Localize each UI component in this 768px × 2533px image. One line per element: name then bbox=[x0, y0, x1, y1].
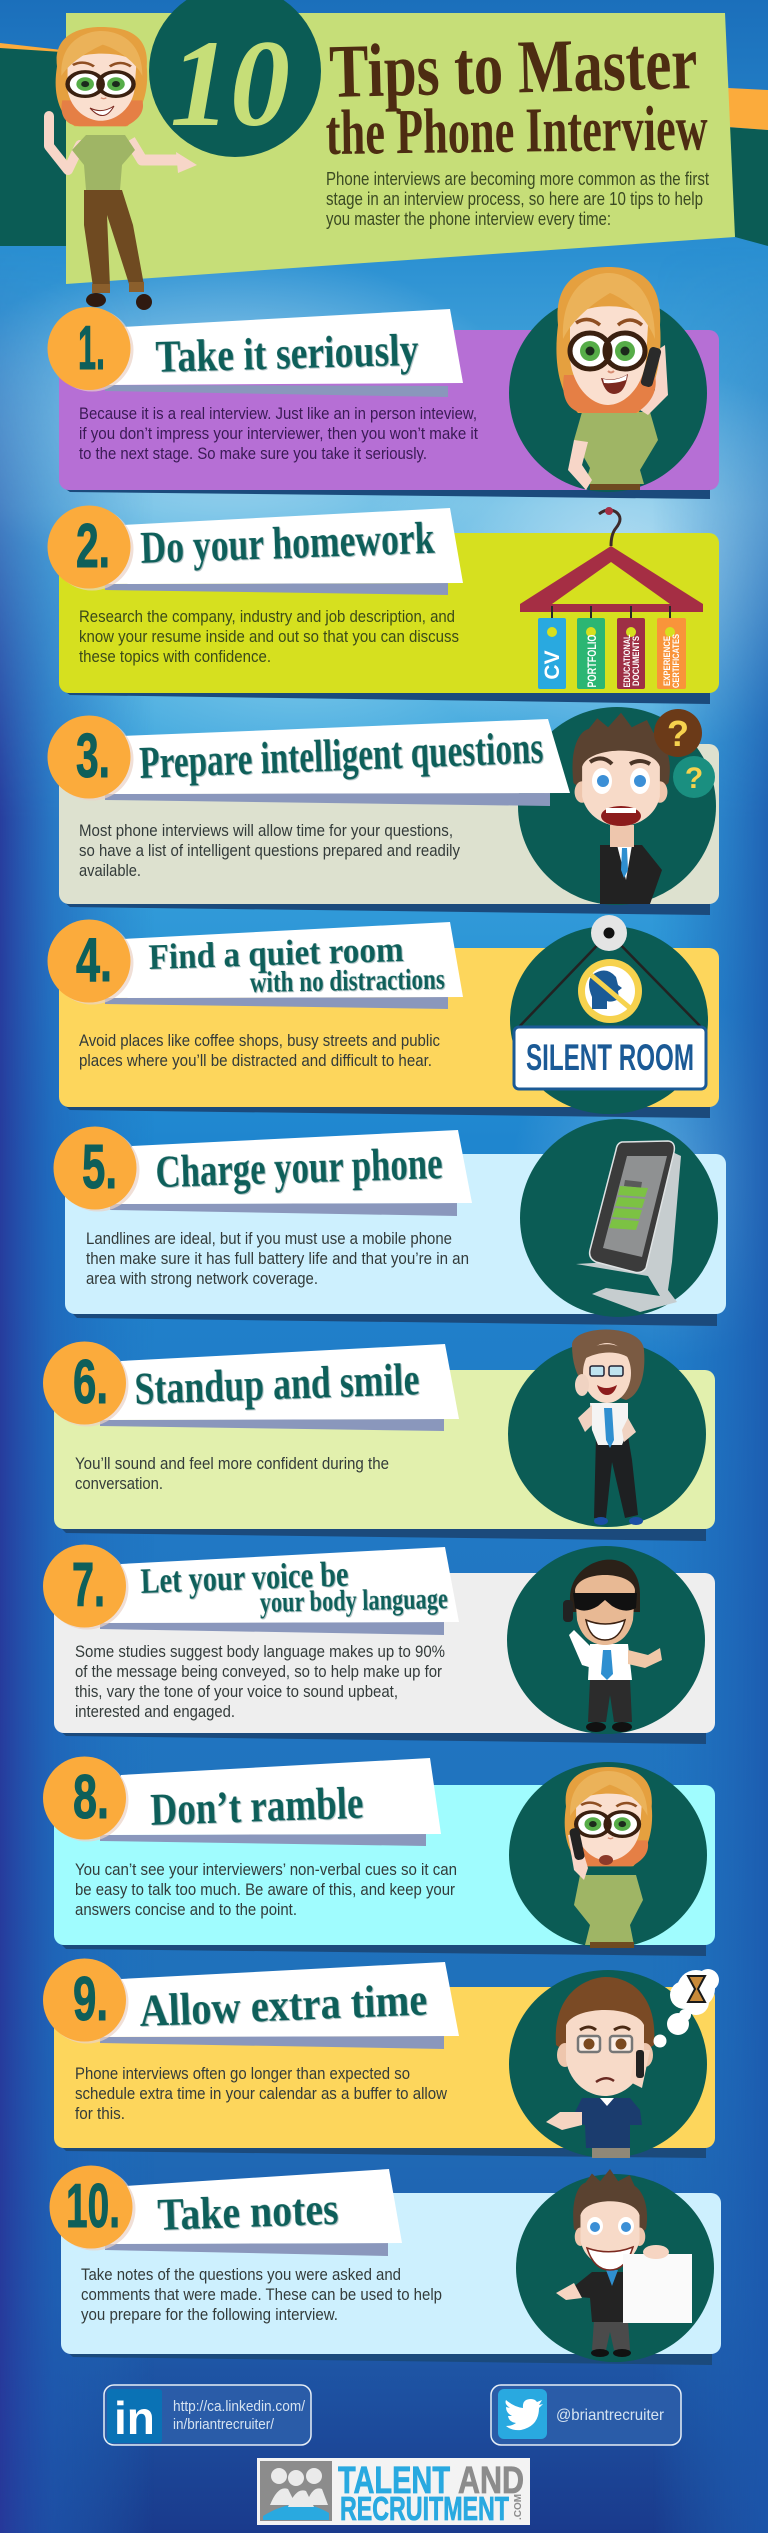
banner bbox=[100, 1834, 426, 1846]
banner bbox=[105, 997, 448, 1009]
body bbox=[75, 1861, 457, 1919]
banner white bbox=[100, 1344, 459, 1420]
character: worried woman on phone bbox=[565, 1767, 652, 1948]
character: confused man with question marks bbox=[572, 709, 715, 904]
logo: talent and recruitment: AND bbox=[458, 2460, 524, 2502]
number bbox=[43, 1544, 128, 1630]
body: You’ll sound and feel more confident during the bbox=[75, 1455, 389, 1473]
banner white bbox=[105, 922, 463, 998]
body: area with strong network coverage. bbox=[86, 1270, 318, 1288]
character: woman on phone bbox=[556, 267, 668, 490]
banner bbox=[100, 2036, 444, 2049]
panel: tip 5 bbox=[65, 1154, 726, 1314]
tip 4 bbox=[48, 915, 719, 1118]
body: available. bbox=[79, 862, 141, 880]
number: 9. bbox=[73, 1965, 108, 2034]
body bbox=[86, 1230, 469, 1288]
number bbox=[54, 1126, 140, 1212]
number bbox=[48, 307, 134, 392]
banner bbox=[105, 385, 448, 397]
circle bbox=[507, 1546, 705, 1734]
number bbox=[43, 1342, 128, 1426]
character: confused man with question marks: ? bbox=[685, 762, 703, 795]
icon: coat hanger with document tags: CERTIFICATES bbox=[671, 634, 681, 688]
banner bbox=[105, 793, 550, 806]
icon: coat hanger with document tags: PORTFOLIO bbox=[585, 634, 599, 688]
body: You can’t see your interviewers’ non-verbal cues so it can bbox=[75, 1861, 457, 1879]
header band: teal and orange ribbons bbox=[0, 43, 768, 246]
body: for this. bbox=[75, 2105, 125, 2123]
number bbox=[43, 1958, 128, 2044]
character: man holding paper bbox=[556, 2169, 692, 2357]
body: know your resume inside and out so that you can discuss bbox=[79, 628, 459, 646]
banner bbox=[110, 1203, 457, 1216]
linkedin contact box bbox=[104, 2385, 311, 2445]
number: 6. bbox=[73, 1348, 108, 1417]
panel: tip 10 bbox=[61, 2193, 721, 2354]
banner bbox=[100, 1419, 444, 1431]
heading: your body language bbox=[259, 1582, 448, 1619]
number bbox=[48, 506, 134, 590]
body: Because it is a real interview. Just like an in person inteview, bbox=[79, 405, 477, 423]
heading: Take notes bbox=[157, 2183, 339, 2240]
body bbox=[79, 608, 459, 666]
body: Research the company, industry and job description, and bbox=[79, 608, 455, 626]
character: confused man with question marks: ? bbox=[667, 713, 689, 754]
tip 5 bbox=[54, 1119, 726, 1326]
body: Avoid places like coffee shops, busy streets and public bbox=[79, 1032, 440, 1050]
circle bbox=[520, 1119, 718, 1317]
tip 10 bbox=[50, 2166, 721, 2365]
tip 3 bbox=[48, 707, 719, 915]
icon: silent room sign bbox=[514, 915, 706, 1089]
body: conversation. bbox=[75, 1475, 163, 1493]
icon: coat hanger with document tags bbox=[520, 507, 703, 689]
banner white bbox=[105, 508, 463, 584]
body: places where you’ll be distracted and difficult to hear. bbox=[79, 1052, 432, 1070]
logo: talent and recruitment bbox=[257, 2458, 530, 2527]
banner white bbox=[100, 1547, 459, 1623]
tip 1 bbox=[48, 267, 719, 499]
panel: tip 1 bbox=[59, 330, 719, 490]
number: 5. bbox=[82, 1133, 117, 1202]
number bbox=[50, 2166, 136, 2250]
body: these topics with confidence. bbox=[79, 648, 271, 666]
body: you prepare for the following interview. bbox=[81, 2306, 338, 2324]
body: answers concise and to the point. bbox=[75, 1901, 297, 1919]
body bbox=[75, 1455, 389, 1493]
panel: tip 2 bbox=[59, 533, 719, 693]
circle bbox=[516, 2174, 714, 2362]
body: of the message being conveyed, so to help make up for bbox=[75, 1663, 442, 1681]
body: Most phone interviews will allow time for your questions, bbox=[79, 822, 453, 840]
tip 7 bbox=[43, 1544, 715, 1744]
heading bbox=[140, 1554, 448, 1619]
panel: tip 8 bbox=[54, 1785, 715, 1945]
number: 4. bbox=[76, 926, 112, 995]
twitter handle: @briantrecruiter bbox=[556, 2407, 665, 2424]
heading: Take it seriously bbox=[155, 324, 419, 382]
heading: Let your voice be bbox=[140, 1554, 349, 1601]
tip 8 bbox=[43, 1756, 715, 1956]
tip 6 bbox=[43, 1329, 715, 1541]
panel: tip 3 bbox=[59, 744, 719, 904]
heading: Standup and smile bbox=[134, 1353, 420, 1414]
body: Take notes of the questions you were asked and bbox=[81, 2266, 401, 2284]
header badge: 10: 10 bbox=[170, 15, 290, 152]
body bbox=[79, 822, 461, 880]
body bbox=[81, 2266, 442, 2324]
banner white bbox=[100, 1758, 441, 1835]
banner white bbox=[105, 2169, 402, 2244]
body: Phone interviews often go longer than expected so bbox=[75, 2065, 410, 2083]
character: man in sunglasses bbox=[563, 1560, 662, 1732]
intro text bbox=[326, 169, 709, 229]
circle bbox=[518, 707, 716, 905]
banner bbox=[100, 1622, 444, 1635]
panel: tip 7 bbox=[54, 1573, 715, 1733]
body: comments that were made. These can be used to help bbox=[81, 2286, 442, 2304]
banner white bbox=[110, 1130, 472, 1204]
heading bbox=[148, 929, 445, 999]
body: to the next stage. So make sure you take it seriously. bbox=[79, 445, 427, 463]
icon: phone on charging stand bbox=[576, 1141, 681, 1312]
panel: tip 6 bbox=[54, 1370, 715, 1529]
body: Landlines are ideal, but if you must use a mobile phone bbox=[86, 1230, 452, 1248]
banner bbox=[105, 2243, 388, 2256]
number: 10. bbox=[66, 2172, 120, 2241]
tip 2 bbox=[48, 506, 719, 704]
number: 3. bbox=[76, 722, 110, 791]
number: 8. bbox=[73, 1763, 109, 1832]
header badge: 10 bbox=[149, 0, 321, 157]
body bbox=[75, 1643, 445, 1721]
heading: Don’t ramble bbox=[150, 1777, 364, 1835]
logo: talent and recruitment: TALENT bbox=[338, 2460, 450, 2502]
circle bbox=[509, 294, 707, 492]
character: woman presenting bbox=[49, 27, 197, 310]
character: businesswoman on phone bbox=[572, 1329, 644, 1525]
body: schedule extra time in your calendar as a buffer to allow bbox=[75, 2085, 447, 2103]
icon: coat hanger with document tags: EXPERIENCE bbox=[662, 636, 672, 686]
body: this, vary the tone of your voice to sound upbeat, bbox=[75, 1683, 398, 1701]
icon: coat hanger with document tags: DOCUMENTS bbox=[631, 636, 641, 686]
panel: tip 4 bbox=[59, 948, 719, 1107]
number bbox=[43, 1756, 128, 1842]
icon: twitter bird bbox=[498, 2389, 547, 2439]
body: then make sure it has full battery life and that you’re in an bbox=[86, 1250, 469, 1268]
twitter contact box bbox=[491, 2385, 681, 2445]
intro text: stage in an interview process, so here are 10 tips to help bbox=[326, 189, 703, 209]
body bbox=[79, 405, 478, 463]
icon: coat hanger with document tags: CV bbox=[541, 650, 564, 680]
heading: with no distractions bbox=[250, 963, 445, 999]
linkedin url: in/briantrecruiter/ bbox=[173, 2416, 275, 2433]
logo: talent and recruitment: .COM bbox=[513, 2494, 524, 2520]
number: 7. bbox=[72, 1551, 105, 1620]
heading: Do your homework bbox=[140, 512, 435, 573]
circle bbox=[510, 926, 708, 1114]
icon: coat hanger with document tags: EDUCATIONAL bbox=[622, 634, 632, 688]
circle bbox=[509, 1970, 707, 2158]
body: be easy to talk too much. Be aware of this, and keep your bbox=[75, 1881, 455, 1899]
heading: Allow extra time bbox=[138, 1973, 428, 2036]
icon: thought bubble with hourglass bbox=[654, 1969, 719, 2048]
linkedin url: http://ca.linkedin.com/ bbox=[173, 2398, 306, 2415]
panel: tip 9 bbox=[54, 1987, 715, 2148]
body: interested and engaged. bbox=[75, 1703, 235, 1721]
heading: Charge your phone bbox=[155, 1137, 443, 1197]
banner white bbox=[105, 719, 570, 794]
number bbox=[48, 716, 134, 800]
number: 2. bbox=[76, 512, 110, 581]
number: 1. bbox=[78, 314, 105, 383]
title bbox=[325, 21, 708, 168]
heading: Find a quiet room bbox=[148, 929, 404, 977]
number bbox=[48, 920, 134, 1004]
body: Some studies suggest body language makes up to 90% bbox=[75, 1643, 445, 1661]
linkedin url bbox=[173, 2398, 306, 2433]
banner white bbox=[100, 1962, 459, 2037]
circle bbox=[509, 1762, 707, 1948]
heading: Prepare intelligent questions bbox=[138, 722, 544, 788]
body: so have a list of intelligent questions prepared and readily bbox=[79, 842, 461, 860]
intro text: you master the phone interview every time: bbox=[326, 209, 611, 229]
header panel bbox=[66, 13, 735, 284]
logo: talent and recruitment: RECRUITMENT bbox=[340, 2490, 509, 2527]
body bbox=[75, 2065, 447, 2123]
icon: linkedin: in bbox=[114, 2392, 155, 2444]
circle bbox=[508, 1341, 706, 1527]
tip 9 bbox=[43, 1958, 719, 2158]
banner bbox=[105, 583, 448, 595]
body bbox=[79, 1032, 440, 1070]
banner white bbox=[105, 309, 463, 385]
body: if you don’t impress your interviewer, then you won’t make it bbox=[79, 425, 478, 443]
character: man with glasses on phone bbox=[546, 1969, 719, 2158]
